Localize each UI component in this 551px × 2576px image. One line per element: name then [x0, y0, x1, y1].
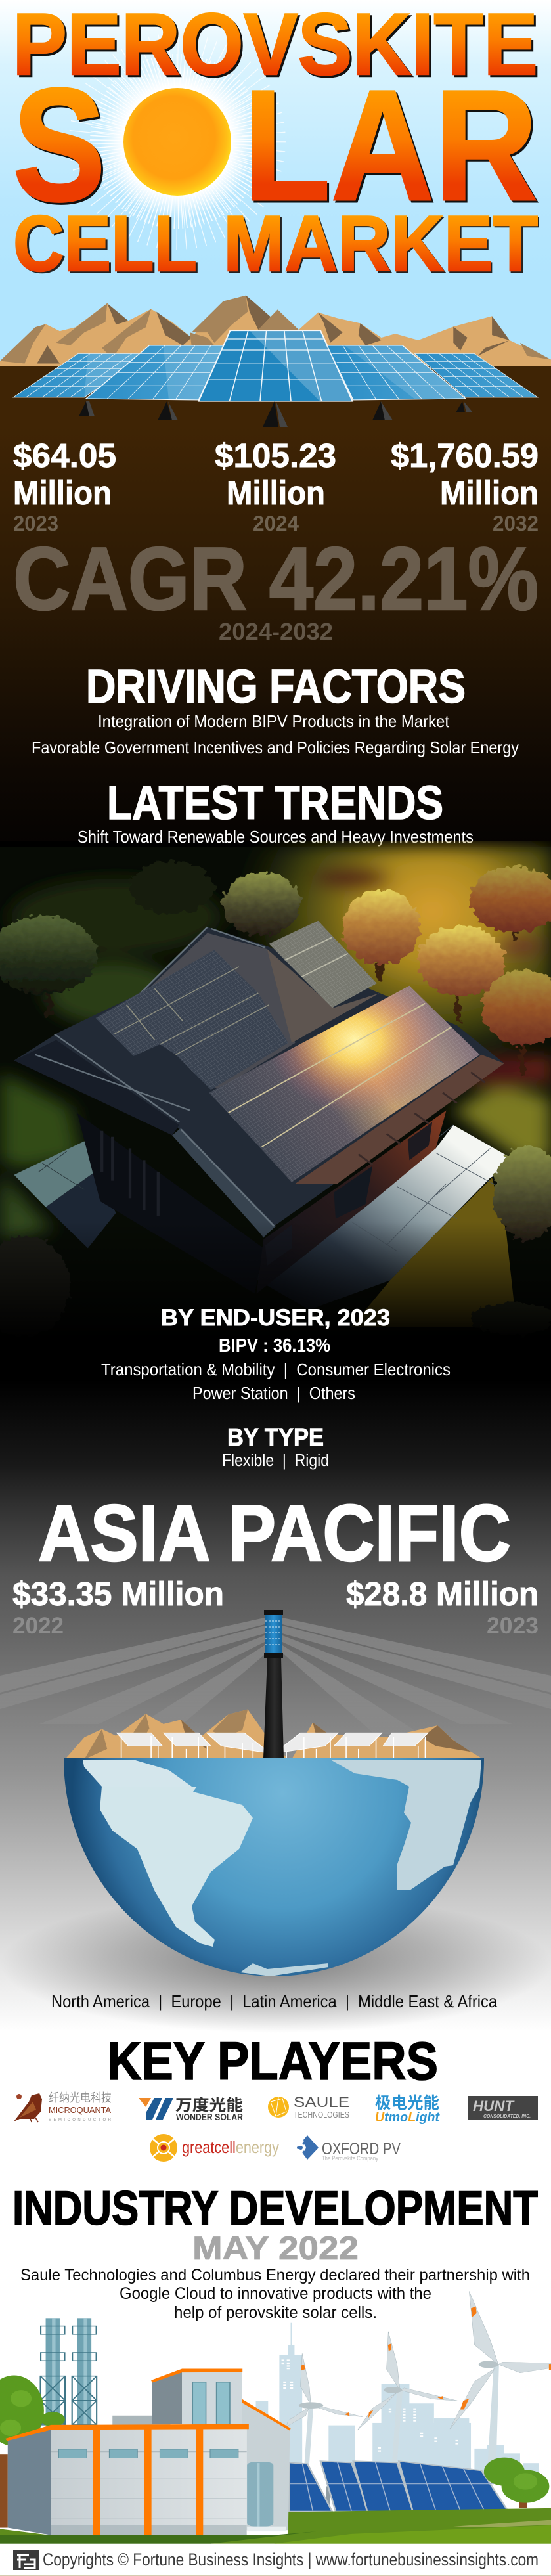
logo: saule technologies: TECHNOLOGIES — [294, 2110, 349, 2120]
latest trends text: Shift Toward Renewable Sources and Heavy Investments — [77, 827, 474, 847]
ground — [0, 2508, 551, 2544]
regions list: North America | Europe | Latin America | Middle East & Africa — [51, 1991, 497, 2011]
continent: africa — [330, 1760, 481, 1890]
development text — [20, 2266, 530, 2322]
pavement — [14, 1125, 520, 1327]
roof — [14, 927, 504, 1238]
logo: oxford pv: OXFORD PV — [322, 2140, 401, 2158]
heading: asia pacific: ASIA PACIFIC — [38, 1488, 511, 1578]
stat: 2023 market value — [13, 437, 116, 535]
stat: 2024 market value — [215, 437, 336, 535]
icon: sun — [91, 55, 264, 228]
stat: 2023 market value: 2023 — [13, 512, 58, 535]
trees — [0, 861, 551, 1336]
title: CELL — [13, 200, 197, 288]
logo: hunt consolidated: HUNT — [473, 2098, 515, 2114]
stat: 2032 market value: 2032 — [493, 512, 539, 535]
globe — [64, 1758, 484, 1976]
heading: by end-user: BY END-USER, 2023 — [161, 1305, 390, 1331]
logo: utmolight — [375, 2090, 440, 2125]
solar panel array — [13, 330, 538, 401]
logo: oxford pv: The Perovskite Company — [322, 2155, 378, 2162]
solar field — [289, 2461, 508, 2528]
background: brown ground — [0, 365, 551, 844]
title: S — [14, 56, 108, 236]
light rays — [0, 1618, 551, 1734]
stat: asia pacific 2022 — [12, 1575, 224, 1639]
development text: help of perovskite solar cells. — [174, 2303, 377, 2322]
left tree — [0, 2376, 65, 2528]
stat: asia pacific 2023: 2023 — [487, 1613, 539, 1639]
logo: hunt consolidated — [468, 2096, 538, 2120]
heading: key players: KEY PLAYERS — [107, 2032, 438, 2091]
panel: inner left — [86, 345, 225, 400]
illustration: house with rooftop solar panels — [0, 847, 551, 1340]
logo: microquanta: MICROQUANTA — [49, 2105, 111, 2115]
title: S — [12, 55, 106, 234]
right trees — [484, 2458, 549, 2508]
logo: wonder solar: 万度光能 — [175, 2092, 243, 2115]
logo: hunt consolidated: CONSOLIDATED, INC. — [483, 2114, 531, 2119]
city skyline — [256, 2323, 539, 2481]
title: MARKET — [223, 200, 538, 288]
chimney tower — [263, 1610, 284, 1758]
icon: fortune business insights logo — [13, 2550, 39, 2570]
development date: MAY 2022 — [192, 2230, 359, 2267]
panel: outer right — [414, 354, 538, 397]
globe shadow — [0, 1895, 551, 2033]
logo: utmolight: UtmoLight — [375, 2110, 440, 2125]
development text: Google Cloud to innovative products with the — [120, 2284, 431, 2303]
driving factors text: Integration of Modern BIPV Products in the Market — [98, 711, 450, 731]
grass and lawn — [0, 847, 551, 1242]
logo: microquanta — [14, 2089, 112, 2122]
footer — [0, 2550, 551, 2576]
illustration: factory, wind turbines and solar field — [0, 2291, 551, 2544]
driving factors text — [32, 711, 519, 757]
stat: 2023 market value: Million — [13, 474, 112, 512]
logo: saule technologies — [268, 2094, 349, 2120]
continent: antarctica — [240, 1963, 328, 1976]
title: CELL — [15, 201, 199, 289]
heading: latest trends: LATEST TRENDS — [107, 777, 443, 830]
title — [12, 0, 540, 289]
panel: center — [198, 330, 353, 401]
stat: asia pacific 2022: $33.35 Million — [12, 1575, 224, 1612]
stat: 2032 market value: $1,760.59 — [391, 437, 539, 474]
logo: microquanta: 纤纳光电科技 — [49, 2089, 112, 2106]
mountains — [0, 296, 551, 366]
stat: 2024 market value: Million — [227, 474, 325, 512]
logo: wonder solar — [139, 2092, 243, 2123]
white solar panels on globe — [117, 1733, 428, 1758]
logo: wonder solar: WONDER SOLAR — [176, 2112, 243, 2123]
stat: 2032 market value — [391, 437, 539, 535]
background: black to white gradient — [0, 841, 551, 2043]
logo: oxford pv — [297, 2135, 401, 2162]
continent: north america tip — [83, 1760, 192, 1787]
stat: 2032 market value: Million — [440, 474, 539, 512]
rooftop solar panels — [96, 921, 479, 1182]
type segments: Flexible | Rigid — [222, 1450, 329, 1470]
stat: 2023 market value: $64.05 — [13, 437, 116, 474]
heading: driving factors: DRIVING FACTORS — [86, 661, 466, 713]
continent: south america — [100, 1787, 253, 1947]
end-user segments — [101, 1335, 451, 1403]
heading: by type: BY TYPE — [227, 1424, 324, 1452]
mountains behind globe — [65, 1710, 483, 1759]
stat: asia pacific 2022: 2022 — [12, 1613, 64, 1639]
wind turbines — [286, 2291, 551, 2464]
logo: saule technologies: SAULE — [294, 2094, 349, 2110]
development text: Saule Technologies and Columbus Energy declared their partnership with — [20, 2266, 530, 2284]
logo: utmolight: 极电光能 — [375, 2090, 439, 2114]
stat: 2024 market value: $105.23 — [215, 437, 336, 474]
logo: greatcell energy: greatcellenergy — [182, 2137, 279, 2157]
panel: outer left — [13, 354, 148, 397]
logo: greatcell energy — [150, 2134, 279, 2162]
factory building — [5, 2369, 291, 2535]
chimneys — [41, 2318, 97, 2426]
stat: asia pacific 2023: $28.8 Million — [346, 1575, 539, 1612]
end-user segments: BIPV : 36.13% — [219, 1335, 330, 1356]
background: sky — [0, 0, 551, 365]
logo: microquanta: SEMICONDUCTOR — [49, 2118, 112, 2122]
stat: asia pacific 2023 — [346, 1575, 539, 1639]
house walls — [77, 1111, 447, 1294]
bottom fade — [0, 1222, 551, 1340]
panel: inner right — [327, 345, 466, 400]
end-user segments: Power Station | Others — [192, 1383, 355, 1403]
end-user segments: Transportation & Mobility | Consumer Electronics — [101, 1360, 451, 1379]
panel support legs — [79, 401, 473, 427]
stat: 2024 market value: 2024 — [253, 512, 299, 535]
stat: CAGR: 2024-2032 — [219, 618, 333, 645]
